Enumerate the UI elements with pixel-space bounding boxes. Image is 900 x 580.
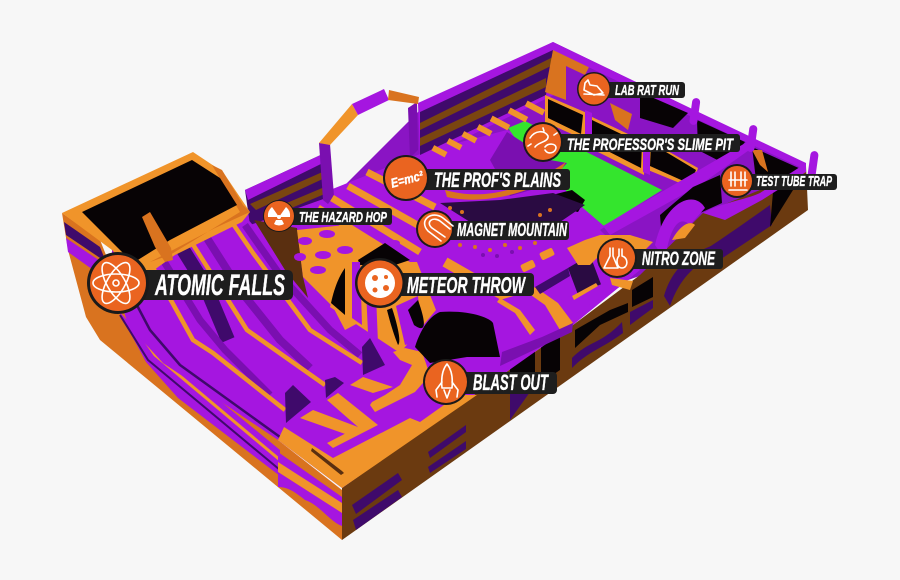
left back wall	[245, 152, 329, 225]
label: test tube trap	[720, 164, 837, 198]
plateau edge	[535, 268, 570, 294]
icon: rat	[584, 80, 604, 95]
label: meteor throw: METEOR THROW	[407, 272, 526, 298]
label: the professor's slime pit: THE PROFESSOR'S SLIME PIT	[567, 135, 734, 154]
label: the hazard hop: THE HAZARD HOP	[299, 209, 388, 226]
right outer wall	[342, 166, 808, 540]
plains dome	[431, 101, 585, 222]
arch	[319, 89, 419, 204]
black notch	[556, 190, 585, 212]
label: test tube trap: TEST TUBE TRAP	[756, 173, 833, 190]
label: blast out: BLAST OUT	[473, 370, 549, 395]
label: atomic falls: ATOMIC FALLS	[154, 269, 285, 302]
icon: rocket	[436, 364, 458, 398]
label: lab rat run	[577, 72, 685, 106]
icon: magnet	[425, 215, 453, 241]
lower floor orange maze	[278, 348, 477, 488]
orange floor stripes	[318, 172, 520, 305]
divider beam	[603, 142, 752, 235]
left outer wall	[62, 213, 342, 540]
nitro zone structure	[560, 163, 806, 315]
label: the hazard hop	[263, 200, 392, 232]
label: the prof's plains: THE PROF'S PLAINS	[434, 169, 561, 192]
label: lab rat run: LAB RAT RUN	[615, 82, 680, 99]
slide	[128, 210, 400, 437]
inflatable structure	[62, 42, 819, 540]
back wall	[418, 42, 590, 160]
hazard hop platform	[254, 220, 420, 330]
tunnel	[415, 287, 573, 366]
icon: meteor	[365, 268, 395, 298]
icon: e=mc2: E=mc²	[389, 168, 425, 191]
label: magnet mountain: MAGNET MOUNTAIN	[457, 220, 568, 240]
green slime pit	[508, 121, 662, 226]
interior base	[330, 42, 806, 290]
label: atomic falls	[87, 252, 293, 314]
label: blast out	[423, 359, 557, 405]
label: meteor throw	[355, 258, 534, 308]
label: nitro zone	[597, 238, 723, 278]
icon: bacteria	[528, 128, 557, 153]
label: the professor's slime pit	[523, 122, 740, 162]
meteor throw wall	[330, 243, 436, 353]
magnet dots	[448, 206, 555, 273]
label: the prof's plains	[383, 155, 570, 201]
main floor	[112, 130, 662, 488]
label: nitro zone: NITRO ZONE	[642, 249, 716, 270]
top platform	[62, 152, 250, 280]
right long wall and windows	[553, 42, 819, 195]
icon: radiation	[268, 207, 290, 226]
windows row	[545, 95, 698, 188]
icon: test tubes	[729, 172, 747, 190]
icon: flasks	[604, 248, 627, 268]
dark openings behind beam	[660, 175, 722, 240]
icon: atom	[93, 259, 139, 307]
label: magnet mountain	[416, 210, 569, 248]
slot	[311, 448, 344, 475]
